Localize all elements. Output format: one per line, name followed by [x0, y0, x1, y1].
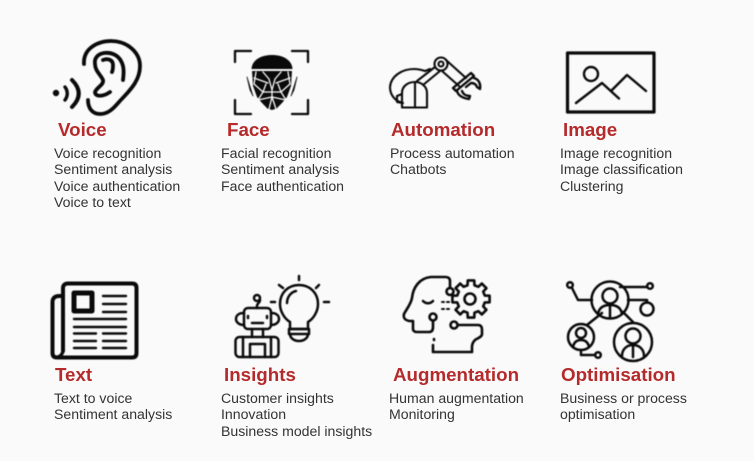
- list: insights capabilities: Innovation: [221, 406, 286, 422]
- list: voice capabilities: Voice to text: [54, 194, 131, 210]
- heading: Augmentation: Augmentation: [393, 364, 519, 385]
- list: optimisation capabilities: Business or process: [560, 390, 687, 406]
- list: image capabilities: Image classification: [560, 161, 683, 177]
- panel: image: [560, 50, 683, 194]
- panel: optimisation: [560, 279, 687, 422]
- list: voice capabilities: Voice recognition: [54, 145, 161, 161]
- list: face capabilities: Facial recognition: [221, 145, 331, 161]
- panel: voice: [52, 38, 180, 210]
- list: optimisation capabilities: optimisation: [560, 406, 635, 422]
- list: voice capabilities: Sentiment analysis: [54, 161, 172, 177]
- icon: robotic arm: [388, 56, 482, 110]
- panel: text: [50, 280, 172, 422]
- list: insights capabilities: Business model insights: [221, 423, 372, 439]
- list: augmentation capabilities: Human augmentation: [389, 390, 524, 406]
- list: text capabilities: Text to voice: [54, 390, 132, 406]
- panel: insights: [221, 274, 372, 439]
- icon: robot and light bulb: [233, 274, 331, 360]
- list: face capabilities: [221, 145, 344, 194]
- list: automation capabilities: [390, 145, 515, 177]
- list: optimisation capabilities: [560, 390, 687, 422]
- heading: Automation: Automation: [391, 119, 495, 140]
- heading: Insights: Insights: [224, 364, 296, 385]
- heading: Text: Text: [55, 364, 92, 385]
- heading: Optimisation: Optimisation: [561, 364, 676, 385]
- list: face capabilities: Face authentication: [221, 178, 344, 194]
- list: image capabilities: Clustering: [560, 178, 623, 194]
- icon: face scan mesh: [233, 49, 310, 116]
- panel: automation: [388, 56, 515, 177]
- icon: picture frame with mountains: [565, 50, 656, 114]
- list: augmentation capabilities: Monitoring: [389, 406, 455, 422]
- list: voice capabilities: Voice authentication: [54, 178, 180, 194]
- list: voice capabilities: [54, 145, 180, 210]
- list: automation capabilities: Process automation: [390, 145, 515, 161]
- list: image capabilities: [560, 145, 683, 194]
- heading: Voice: Voice: [58, 119, 107, 140]
- icon: connected people network: [565, 279, 656, 364]
- icon: ear with sound waves: [52, 38, 143, 117]
- panel: face: [221, 49, 344, 194]
- heading: Face: Face: [227, 119, 270, 140]
- list: text capabilities: [54, 390, 172, 422]
- panel: augmentation: [389, 274, 524, 422]
- list: insights capabilities: Customer insights: [221, 390, 334, 406]
- list: text capabilities: Sentiment analysis: [54, 406, 172, 422]
- list: insights capabilities: [221, 390, 372, 439]
- list: face capabilities: Sentiment analysis: [221, 161, 339, 177]
- list: image capabilities: Image recognition: [560, 145, 672, 161]
- icon: head with gear: [402, 274, 492, 354]
- list: augmentation capabilities: [389, 390, 524, 422]
- heading: Image: Image: [563, 119, 617, 140]
- icon: newspaper: [50, 280, 140, 360]
- list: automation capabilities: Chatbots: [390, 161, 446, 177]
